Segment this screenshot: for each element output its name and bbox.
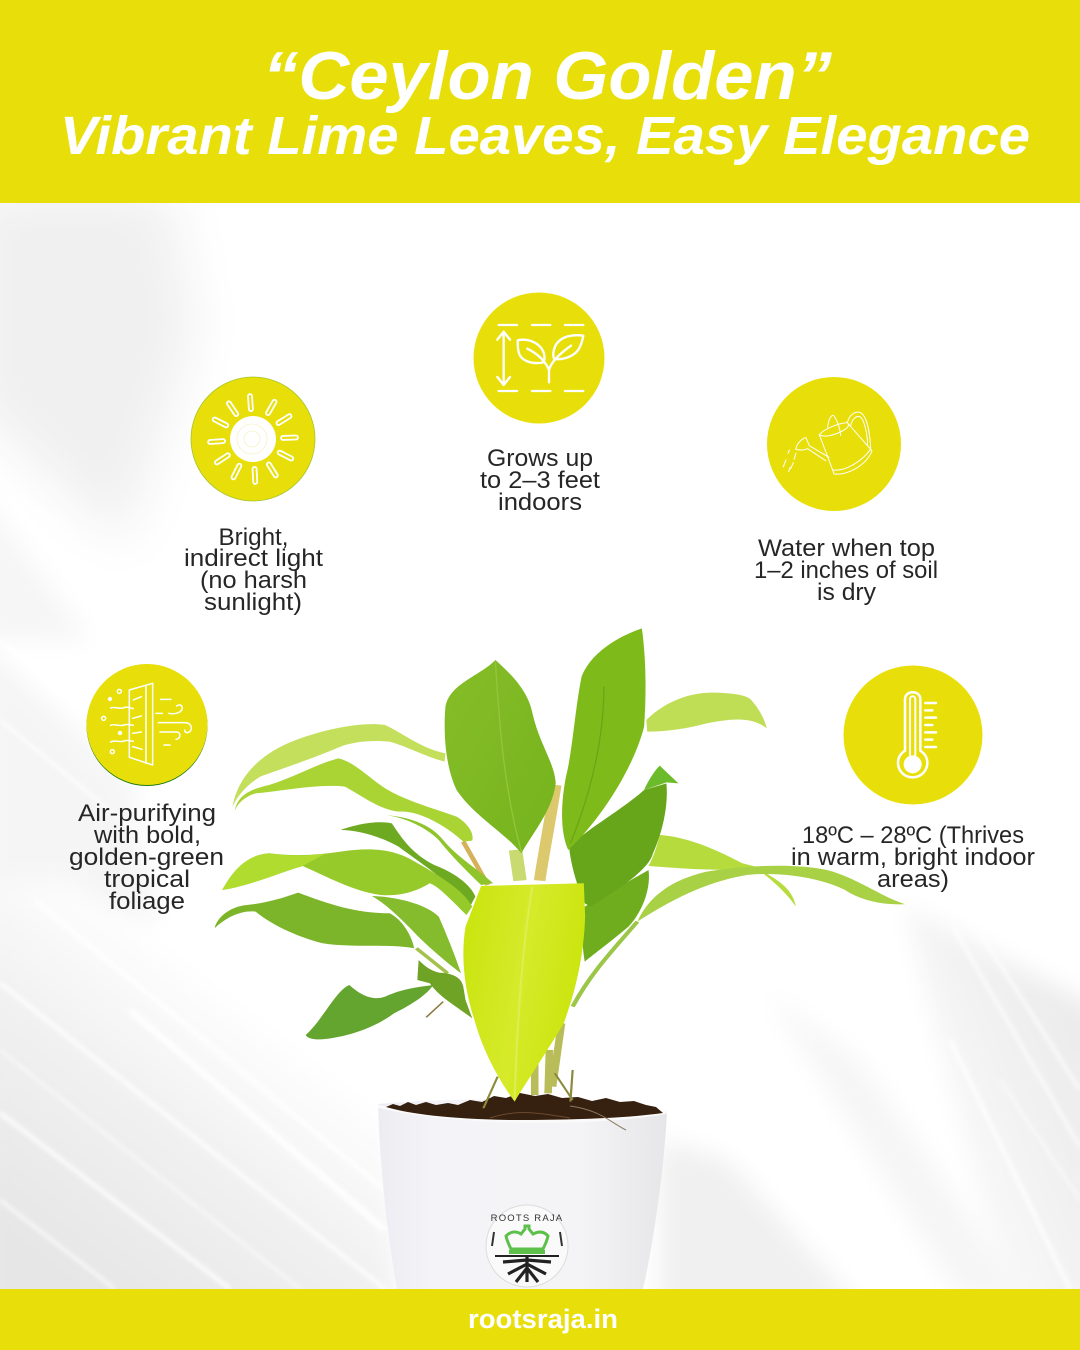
footer url: rootsraja.in (468, 1304, 618, 1334)
caption: air purifying (69, 800, 224, 915)
feature: temperature (791, 666, 1035, 893)
leaf: right dark tip (644, 766, 678, 790)
leaf: upper left pale (232, 724, 445, 807)
leaf: lower right dark (582, 870, 649, 962)
icon: thermometer (844, 666, 982, 804)
caption: water: is dry (817, 579, 876, 606)
plant pot (378, 1093, 667, 1289)
leaf: left mid (222, 849, 472, 915)
title: “Ceylon Golden” (263, 38, 832, 114)
caption: temperature: 18ºC – 28ºC (Thrives (802, 822, 1024, 849)
icon: watering can (767, 377, 901, 511)
caption: water: Water when top (758, 535, 935, 562)
caption: height: Grows up (487, 445, 593, 472)
feature: light (184, 377, 323, 616)
leaf: lower centre (372, 896, 461, 973)
leaf: narrow (384, 815, 493, 885)
leaf: small dark left (341, 822, 475, 907)
caption: air purifying: Air-purifying (78, 800, 216, 827)
icon: air filter (86, 664, 208, 786)
caption: height: indoors (498, 489, 582, 516)
caption: air purifying: golden-green (69, 844, 224, 871)
caption: height: to 2–3 feet (480, 467, 600, 494)
caption: temperature: areas) (877, 866, 949, 893)
caption: height (480, 445, 600, 516)
stems (416, 785, 637, 1108)
icon: plant height (474, 292, 604, 424)
caption: air purifying: tropical (104, 866, 190, 893)
title: Vibrant Lime Leaves, Easy Elegance (60, 106, 1030, 166)
pot logo badge: ROOTS RAJA (491, 1213, 563, 1224)
plant (215, 628, 905, 1108)
leaf: far right long (637, 866, 905, 922)
caption: light: indirect light (184, 545, 323, 572)
caption: light (184, 524, 323, 616)
caption: light: sunlight) (204, 589, 302, 616)
leaf: lower left (215, 893, 414, 948)
caption: water: 1–2 inches of soil (754, 557, 938, 584)
caption: air purifying: with bold, (93, 822, 201, 849)
leaf: bottom small (417, 960, 472, 1018)
footer band (0, 1289, 1080, 1350)
leaf: tall right (562, 628, 646, 850)
caption: water (754, 535, 938, 606)
leaf: upper right pale (646, 693, 767, 732)
leaf: bottom left (306, 985, 433, 1039)
pot logo badge (486, 1205, 568, 1287)
leaf: large centre lime (463, 883, 585, 1102)
title (60, 38, 1030, 166)
caption: light: (no harsh (200, 567, 307, 594)
leaf: centre left tall (445, 660, 556, 853)
caption: temperature (791, 822, 1035, 893)
leaf: right dark (569, 783, 667, 907)
leaf: upper left bright (235, 758, 473, 842)
caption: temperature: in warm, bright indoor (791, 844, 1035, 871)
feature: height (474, 292, 604, 516)
caption: light: Bright, (218, 524, 288, 551)
header band (0, 0, 1080, 203)
leaf: right pale (649, 835, 796, 907)
caption: air purifying: foliage (109, 888, 185, 915)
feature: water (754, 377, 938, 606)
feature: air purifying (69, 664, 224, 915)
soil (386, 1093, 663, 1130)
icon: sun (191, 377, 315, 501)
